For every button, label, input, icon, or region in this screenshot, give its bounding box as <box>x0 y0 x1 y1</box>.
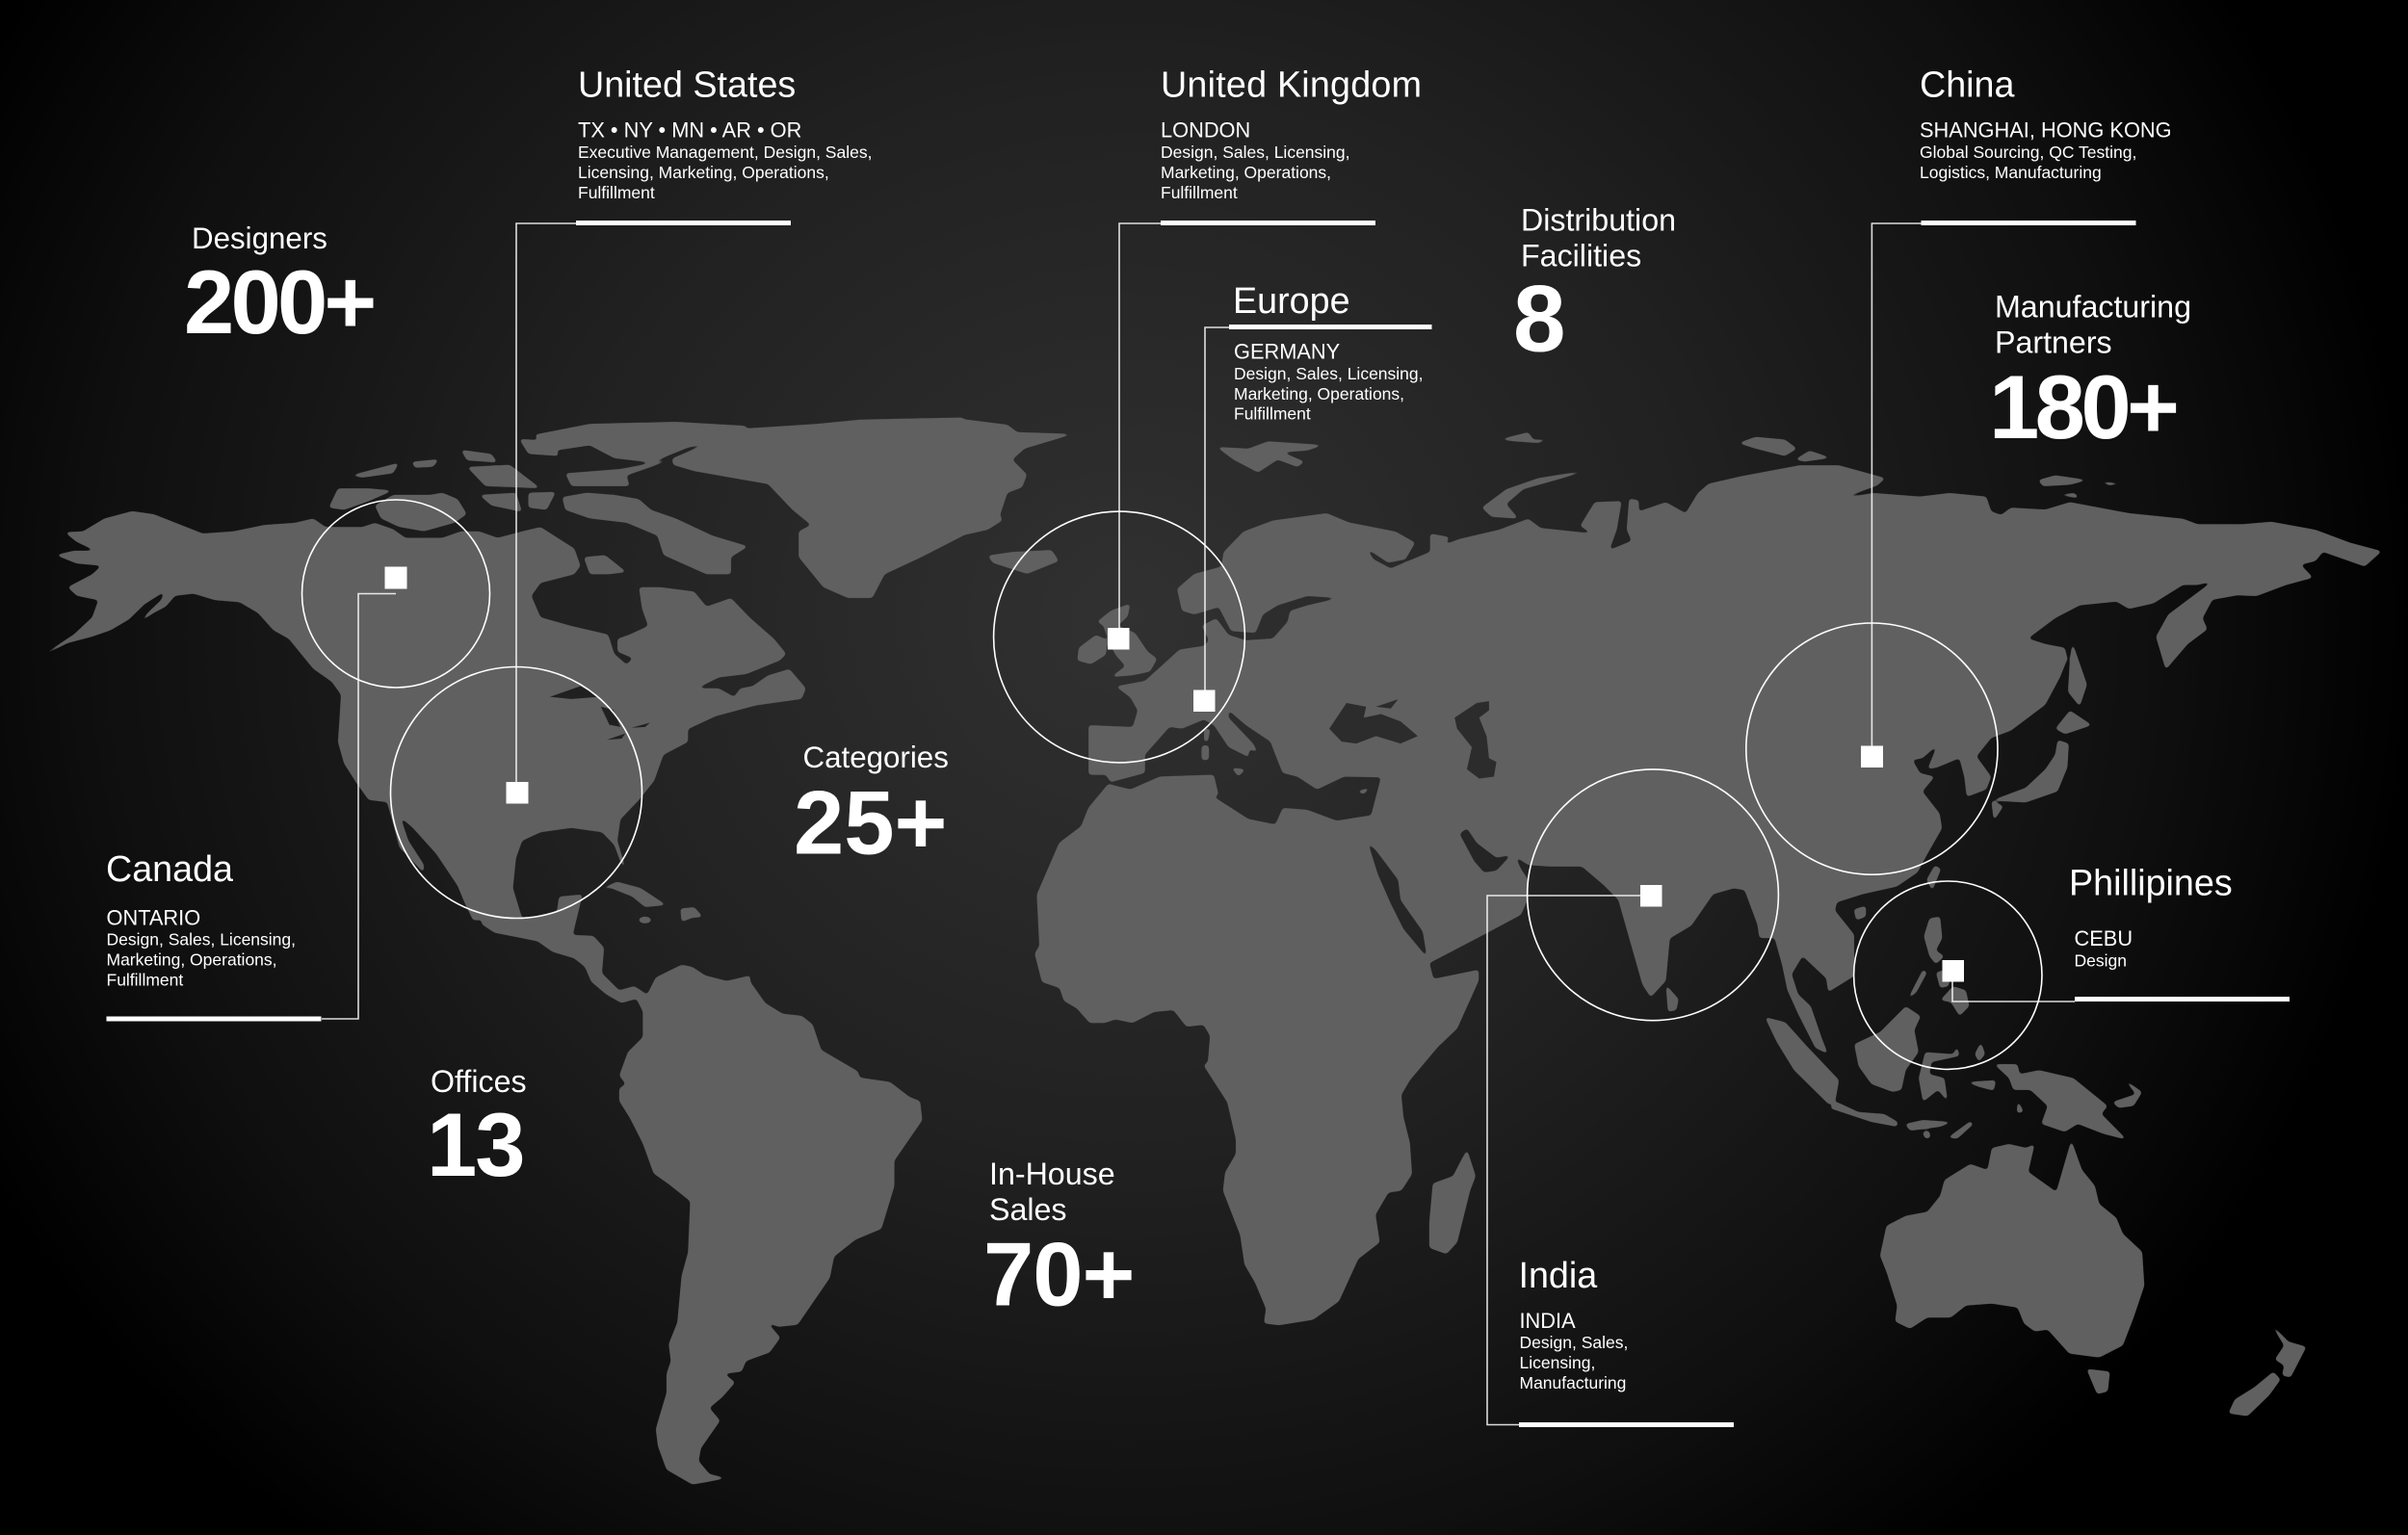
North America <box>31 417 963 921</box>
panel: Canada: ONTARIO <box>106 906 200 930</box>
panel: United Kingdom: LONDON <box>1161 118 1250 143</box>
location marker: Europe <box>1193 327 1229 712</box>
panel: United Kingdom: Fulfillment <box>1161 183 1238 202</box>
stat: In-House Sales <box>983 1157 1134 1325</box>
panel: United States: Licensing, Marketing, Operations, <box>578 163 829 182</box>
panel: Europe: Marketing, Operations, <box>1234 384 1404 403</box>
panel: United Kingdom: United Kingdom <box>1161 65 1422 105</box>
panel: China: Logistics, Manufacturing <box>1920 163 2102 182</box>
East Asia islands <box>1739 437 2128 921</box>
stat: Distribution Facilities <box>1513 202 1676 372</box>
panel: Europe: Design, Sales, Licensing, <box>1234 364 1424 383</box>
location marker: India <box>1487 769 1778 1425</box>
panel: United Kingdom: Marketing, Operations, <box>1161 163 1331 182</box>
panel: Europe: GERMANY <box>1234 340 1341 364</box>
panel: Canada: Marketing, Operations, <box>106 950 277 970</box>
panel: United States: TX • NY • MN • AR • OR <box>578 118 801 143</box>
Black Sea and Caspian Sea <box>1329 699 1497 778</box>
panel: United Kingdom <box>1161 65 1422 225</box>
world map <box>31 417 2382 1485</box>
Central America and South America <box>482 881 923 1485</box>
stat: Manufacturing Partners: Manufacturing <box>1995 289 2191 324</box>
panel: India: Manufacturing <box>1520 1373 1626 1392</box>
stat: Manufacturing Partners <box>1989 289 2191 457</box>
panel: United States <box>576 65 872 225</box>
stat: Offices: Offices <box>431 1064 527 1099</box>
panel: China <box>1920 65 2172 225</box>
panel: China: SHANGHAI, HONG KONG <box>1920 118 2172 143</box>
panel: China: China <box>1920 65 2015 105</box>
stat: Manufacturing Partners: Partners <box>1995 325 2112 360</box>
stat: Distribution Facilities: 8 <box>1513 266 1563 372</box>
panel: United States: United States <box>578 65 796 105</box>
location marker: China <box>1746 223 1998 874</box>
Africa <box>1034 774 1679 1325</box>
panel: India: Licensing, <box>1520 1353 1595 1372</box>
stat: Offices: 13 <box>427 1094 524 1195</box>
Great Lakes <box>550 686 650 740</box>
panel: Canada: Fulfillment <box>106 971 183 990</box>
stat: Distribution Facilities: Distribution <box>1521 202 1676 237</box>
stat: Categories: 25+ <box>794 772 947 873</box>
stat: Distribution Facilities: Facilities <box>1521 239 1641 273</box>
panel: Canada: Canada <box>106 848 233 889</box>
Eurasia <box>963 419 2382 1054</box>
Southeast Asia and Oceania <box>1765 917 2307 1417</box>
stat: Designers: 200+ <box>184 251 374 352</box>
panel: Canada: Design, Sales, Licensing, <box>106 930 296 950</box>
panel: Canada <box>106 848 322 1021</box>
panel: Phillipines: Phillipines <box>2069 863 2233 903</box>
location marker: United Kingdom <box>994 223 1244 763</box>
stat: Categories: Categories <box>803 741 949 774</box>
panel: India: Design, Sales, <box>1520 1333 1628 1352</box>
panel: United States: Executive Management, Design, Sales, <box>578 143 872 162</box>
panel: India <box>1518 1255 1734 1427</box>
panel: Europe <box>1229 280 1431 424</box>
stat: Manufacturing Partners: 180+ <box>1989 356 2177 457</box>
stat: Designers: Designers <box>192 221 327 255</box>
panel: Phillipines: CEBU <box>2075 926 2133 950</box>
panel: Phillipines: Design <box>2075 950 2127 970</box>
location marker: Canada <box>302 500 489 1019</box>
stat: In-House Sales: 70+ <box>983 1224 1134 1325</box>
panel: Phillipines <box>2069 863 2290 1002</box>
stat: In-House Sales: In-House <box>989 1157 1115 1191</box>
stat: In-House Sales: Sales <box>989 1192 1067 1227</box>
panel: United States: Fulfillment <box>578 183 655 202</box>
panel: India: India <box>1518 1255 1597 1295</box>
panel: China: Global Sourcing, QC Testing, <box>1920 143 2136 162</box>
location marker: United States <box>391 223 641 919</box>
location marker: Phillipines <box>1854 881 2075 1069</box>
inland seas and lakes <box>550 686 1497 778</box>
panel: India: INDIA <box>1520 1309 1576 1333</box>
panel: Europe: Europe <box>1233 280 1350 321</box>
panel: Europe: Fulfillment <box>1234 404 1311 424</box>
panel: United Kingdom: Design, Sales, Licensing, <box>1161 143 1350 162</box>
